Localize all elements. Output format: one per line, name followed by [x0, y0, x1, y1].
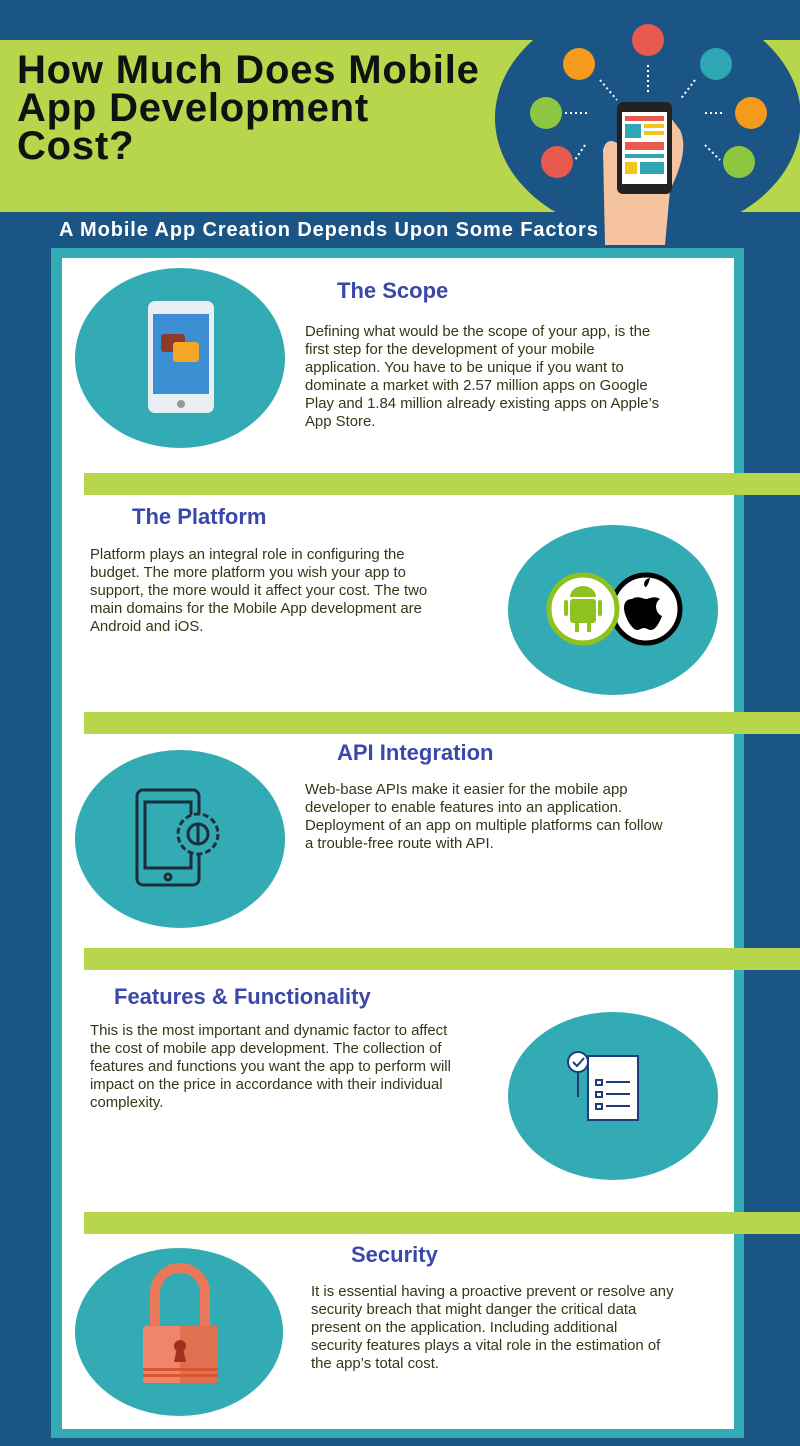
section: Security: [75, 1242, 674, 1416]
title: [17, 48, 480, 168]
text: features and functions you want the app to perform will: [90, 1059, 451, 1075]
text: a trouble-free route with API.: [305, 836, 494, 852]
title: Cost?: [17, 124, 134, 168]
text: It is essential having a proactive prevent or resolve any: [311, 1284, 674, 1300]
text: [305, 782, 663, 852]
section: The Scope: [75, 268, 659, 448]
text: Web-base APIs make it easier for the mobile app: [305, 782, 628, 798]
text: present on the application. Including additional: [311, 1320, 617, 1336]
text: impact on the price in accordance with their individual: [90, 1077, 443, 1093]
icon: phone with chat: [75, 268, 285, 448]
heading: The Scope: [337, 278, 448, 303]
divider bars: [84, 473, 800, 495]
text: application. You have to be unique if you want to: [305, 360, 624, 376]
icon: padlock: [75, 1248, 283, 1416]
header band: [0, 40, 800, 212]
text: dominate a market with 2.57 million apps on Google: [305, 378, 648, 394]
text: budget. The more platform you wish your app to: [90, 565, 406, 581]
section: The Platform: [90, 504, 718, 695]
section: API Integration: [75, 740, 663, 928]
text: Deployment of an app on multiple platforms can follow: [305, 818, 663, 834]
text: Android and iOS.: [90, 619, 203, 635]
text: developer to enable features into an application.: [305, 800, 622, 816]
section: Features & Functionality: [90, 984, 718, 1180]
main panel: [51, 248, 744, 1438]
text: complexity.: [90, 1095, 163, 1111]
text: main domains for the Mobile App development are: [90, 601, 422, 617]
text: Platform plays an integral role in configuring the: [90, 547, 405, 563]
icon: phone with gear: [75, 750, 285, 928]
header illustration: phone with app icons: [495, 24, 800, 245]
text: first step for the development of your mobile: [305, 342, 595, 358]
title: How Much Does Mobile: [17, 48, 480, 92]
text: [90, 547, 427, 635]
heading: Security: [351, 1242, 438, 1267]
text: the app’s total cost.: [311, 1356, 439, 1372]
text: support, the more would it affect your cost. The two: [90, 583, 427, 599]
text: App Store.: [305, 414, 375, 430]
text: Play and 1.84 million already existing apps on Apple’s: [305, 396, 659, 412]
icon: android & apple: [508, 525, 718, 695]
text: security features plays a vital role in the estimation of: [311, 1338, 660, 1354]
heading: API Integration: [337, 740, 493, 765]
text: security breach that might danger the critical data: [311, 1302, 636, 1318]
text: [311, 1284, 674, 1372]
subtitle: A Mobile App Creation Depends Upon Some Factors: [59, 219, 599, 241]
text: the cost of mobile app development. The collection of: [90, 1041, 442, 1057]
title: App Development: [17, 86, 369, 130]
text: [90, 1023, 451, 1111]
heading: Features & Functionality: [114, 984, 371, 1009]
heading: The Platform: [132, 504, 266, 529]
icon: checklist: [508, 1012, 718, 1180]
text: Defining what would be the scope of your app, is the: [305, 324, 650, 340]
text: [305, 324, 659, 430]
text: This is the most important and dynamic factor to affect: [90, 1023, 447, 1039]
